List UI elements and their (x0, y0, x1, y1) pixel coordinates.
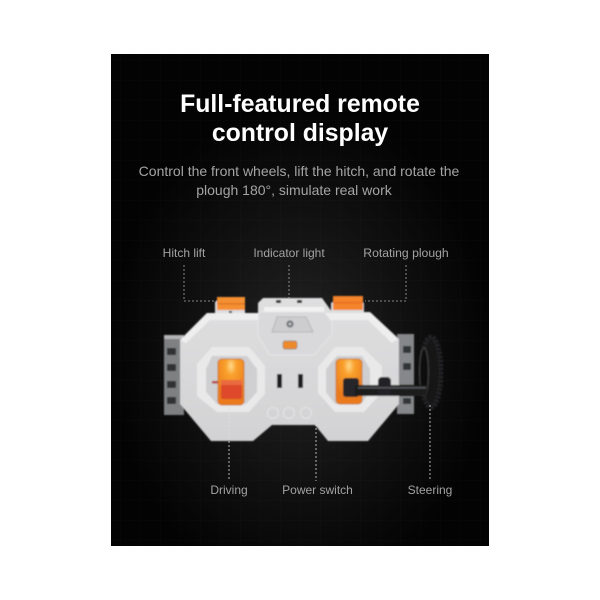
leader lines: top labels (184, 265, 406, 301)
centre indicator plate (258, 312, 332, 355)
left joystick socket (197, 347, 265, 412)
title (180, 91, 420, 147)
subtitle text: Control the front wheels, lift the hitch, and rotate the (139, 163, 460, 179)
subtitle text: plough 180°, simulate real work (196, 182, 393, 198)
label: Driving: Driving (210, 483, 248, 497)
icon: right side connector (397, 334, 414, 414)
top bevel highlights (180, 313, 258, 343)
label: Hitch lift: Hitch lift (163, 246, 206, 260)
remote control body (180, 296, 427, 441)
plough lever (331, 296, 364, 319)
three buttons (268, 408, 312, 418)
subtitle text (139, 163, 460, 198)
top slots (276, 300, 281, 303)
title: Full-featured remote (180, 91, 420, 118)
housing outline (180, 298, 399, 441)
right joystick socket (318, 347, 382, 412)
panel: dark background (111, 54, 489, 546)
label: Indicator light: Indicator light (253, 246, 325, 260)
label: Power switch: Power switch (282, 483, 353, 497)
power switches (277, 374, 303, 388)
icon: left side connector (164, 335, 184, 415)
title: control display (212, 120, 388, 147)
leader lines: bottom labels (229, 405, 430, 481)
icon: steering gear wheel (420, 337, 441, 407)
steering stick (343, 377, 427, 397)
label: Rotating plough: Rotating plough (363, 246, 449, 260)
hitch lift lever (215, 297, 245, 319)
label: Steering: Steering (408, 483, 452, 497)
